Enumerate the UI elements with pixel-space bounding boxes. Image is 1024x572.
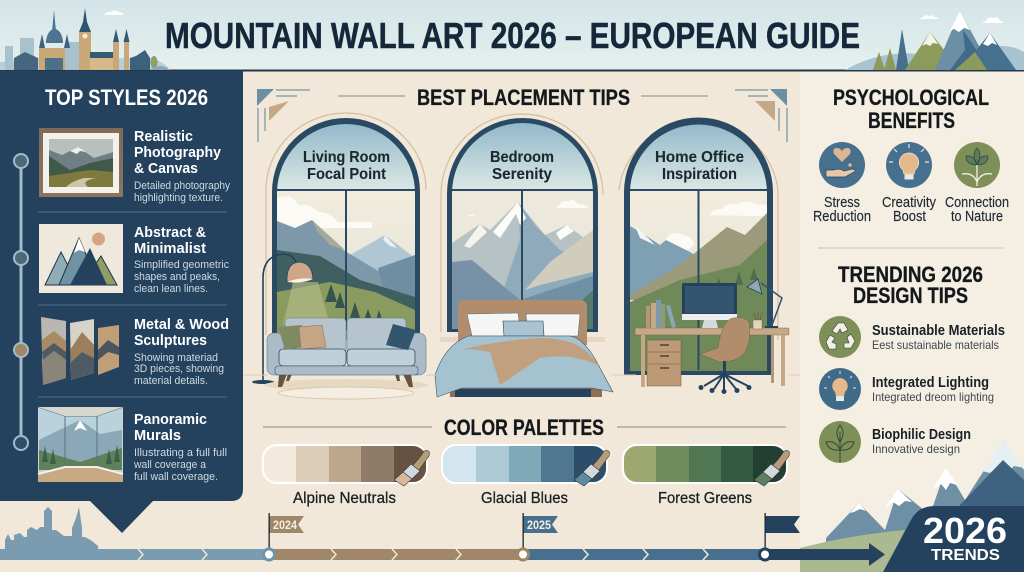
style 1 text	[134, 128, 230, 204]
label: connection to nature	[945, 195, 1009, 225]
tip: biophilic design	[872, 427, 971, 456]
tip: sustainable materials: Eest sustainable materials	[872, 338, 999, 352]
label: connection to nature: Connection	[945, 195, 1009, 211]
style 2 text: clean lean lines.	[134, 283, 208, 295]
panel: best placement tips	[243, 85, 800, 399]
icon: stress reduction	[819, 142, 865, 188]
style 1: framed photograph	[39, 128, 123, 197]
style 1 text: Realistic	[134, 128, 193, 145]
flag 2025: 2025	[527, 520, 552, 532]
tip: biophilic design: Innovative design	[872, 442, 960, 456]
badge: 2026 trends	[883, 506, 1024, 572]
panel: color palettes	[263, 415, 789, 507]
style 4 text: Murals	[134, 427, 181, 444]
style 2: abstract mountains	[39, 224, 123, 293]
window: living room	[266, 113, 426, 340]
label: creativity boost	[882, 195, 937, 225]
flag 2024	[268, 513, 304, 549]
flag 2025	[522, 513, 558, 549]
icon: paint brush	[394, 451, 429, 486]
right column background	[800, 71, 1024, 572]
window label: Serenity	[492, 166, 552, 183]
window label	[655, 149, 744, 183]
window label: Focal Point	[307, 166, 387, 183]
label: creativity boost: Creativity	[882, 195, 937, 211]
heading: trending 2026 design tips	[838, 262, 983, 308]
style 3 text: 3D pieces, showing	[134, 363, 224, 375]
style 2 text: Simplified geometric	[134, 259, 229, 271]
style 3 text	[134, 316, 229, 387]
style 3 text: Metal & Wood	[134, 316, 229, 333]
style 2 text: Abstract &	[134, 224, 206, 241]
tip: integrated lighting	[872, 375, 994, 404]
tip: integrated lighting: Integrated dreom lighting	[872, 390, 994, 404]
palette: forest greens	[623, 445, 789, 486]
label: stress reduction	[813, 195, 871, 225]
style 1 text: Photography	[134, 144, 222, 161]
style 4 text: wall coverage a	[133, 459, 207, 471]
tip: biophilic design: Biophilic Design	[872, 427, 971, 443]
palette: alpine neutrals	[263, 445, 429, 486]
window: bedroom	[441, 114, 603, 332]
tip: sustainable materials	[872, 323, 1005, 352]
style 4 text: Panoramic	[134, 411, 207, 428]
floor lines	[243, 374, 800, 376]
flag 2026	[764, 513, 800, 549]
bed	[435, 300, 613, 397]
rug under sofa	[264, 379, 428, 399]
label: forest greens: Forest Greens	[658, 490, 752, 507]
label: stress reduction: Reduction	[813, 209, 871, 225]
heading: trending 2026 design tips: DESIGN TIPS	[853, 283, 968, 308]
illustration: European skyline	[0, 8, 170, 70]
style 4 text: Illustrating a full full	[134, 447, 227, 459]
timeline rail with nodes	[14, 154, 28, 450]
style 3: metal and wood triptych	[41, 317, 119, 385]
header band	[0, 0, 1024, 72]
icon: paint brush	[754, 451, 789, 486]
heading: top styles: TOP STYLES 2026	[45, 85, 208, 110]
illustration: bottom left skyline	[5, 507, 98, 549]
window label: Inspiration	[662, 166, 737, 183]
badge: 2026 trends: TRENDS	[931, 547, 1000, 564]
label: glacial blues: Glacial Blues	[481, 490, 568, 507]
floor lamp	[252, 254, 313, 384]
corner ornament left	[257, 89, 310, 142]
window label: Bedroom	[490, 149, 554, 166]
sofa	[267, 318, 426, 387]
icon: creativity boost	[886, 142, 932, 188]
panel: trending design tips	[819, 262, 1005, 463]
heading: psychological benefits: BENEFITS	[868, 108, 955, 133]
style 3 text: material details.	[134, 375, 208, 387]
window: home office	[619, 118, 778, 375]
label: alpine neutrals: Alpine Neutrals	[293, 490, 396, 507]
palette: glacial blues	[442, 445, 609, 486]
flag 2024: 2024	[273, 520, 298, 532]
style 4 text: full wall coverage.	[134, 471, 218, 483]
style 1 text: Detailed photography	[134, 180, 230, 192]
tip: integrated lighting: Integrated Lighting	[872, 375, 989, 391]
icon: paint brush	[574, 451, 609, 486]
heading: best placement tips: BEST PLACEMENT TIPS	[417, 85, 630, 110]
heading: psychological benefits	[833, 85, 989, 133]
style 4: panoramic mural room	[38, 407, 123, 482]
corner ornament right	[735, 89, 787, 142]
window label	[303, 149, 390, 183]
heading: trending 2026 design tips: TRENDING 2026	[838, 262, 983, 287]
style 2 text	[134, 224, 229, 295]
style 1 text: highlighting texture.	[134, 192, 223, 204]
tip: sustainable materials: Sustainable Materials	[872, 323, 1005, 339]
style 1 text: & Canvas	[134, 160, 198, 177]
icon: connection to nature	[954, 142, 1000, 188]
label: connection to nature: to Nature	[951, 209, 1003, 225]
style 2 text: shapes and peaks,	[134, 271, 220, 283]
illustration: alpine peaks	[845, 11, 1024, 70]
badge: 2026 trends: 2026	[923, 510, 1007, 551]
window label: Home Office	[655, 149, 744, 166]
heading: psychological benefits: PSYCHOLOGICAL	[833, 85, 989, 110]
timeline: 2024 to 2026	[0, 513, 885, 566]
icon: recycling	[819, 316, 861, 358]
title: MOUNTAIN WALL ART 2026 – EUROPEAN GUIDE	[165, 15, 860, 56]
panel: top styles	[0, 71, 243, 533]
window label	[490, 149, 554, 183]
heading: color palettes: COLOR PALETTES	[444, 415, 604, 440]
style 2 text: Minimalist	[134, 240, 206, 257]
label: creativity boost: Boost	[893, 209, 926, 225]
window label: Living Room	[303, 149, 390, 166]
style 4 text	[133, 411, 227, 483]
style 3 text: Sculptures	[134, 332, 207, 349]
panel: psychological benefits	[813, 85, 1009, 225]
arrow head	[765, 543, 885, 566]
label: stress reduction: Stress	[824, 195, 860, 211]
illustration: bottom right mountains	[800, 441, 1024, 572]
icon: biophilic plant	[819, 421, 861, 463]
style 3 text: Showing materiad	[134, 352, 218, 364]
desk with monitor, books, chair and lamp	[635, 279, 789, 394]
icon: integrated lighting	[819, 368, 861, 410]
